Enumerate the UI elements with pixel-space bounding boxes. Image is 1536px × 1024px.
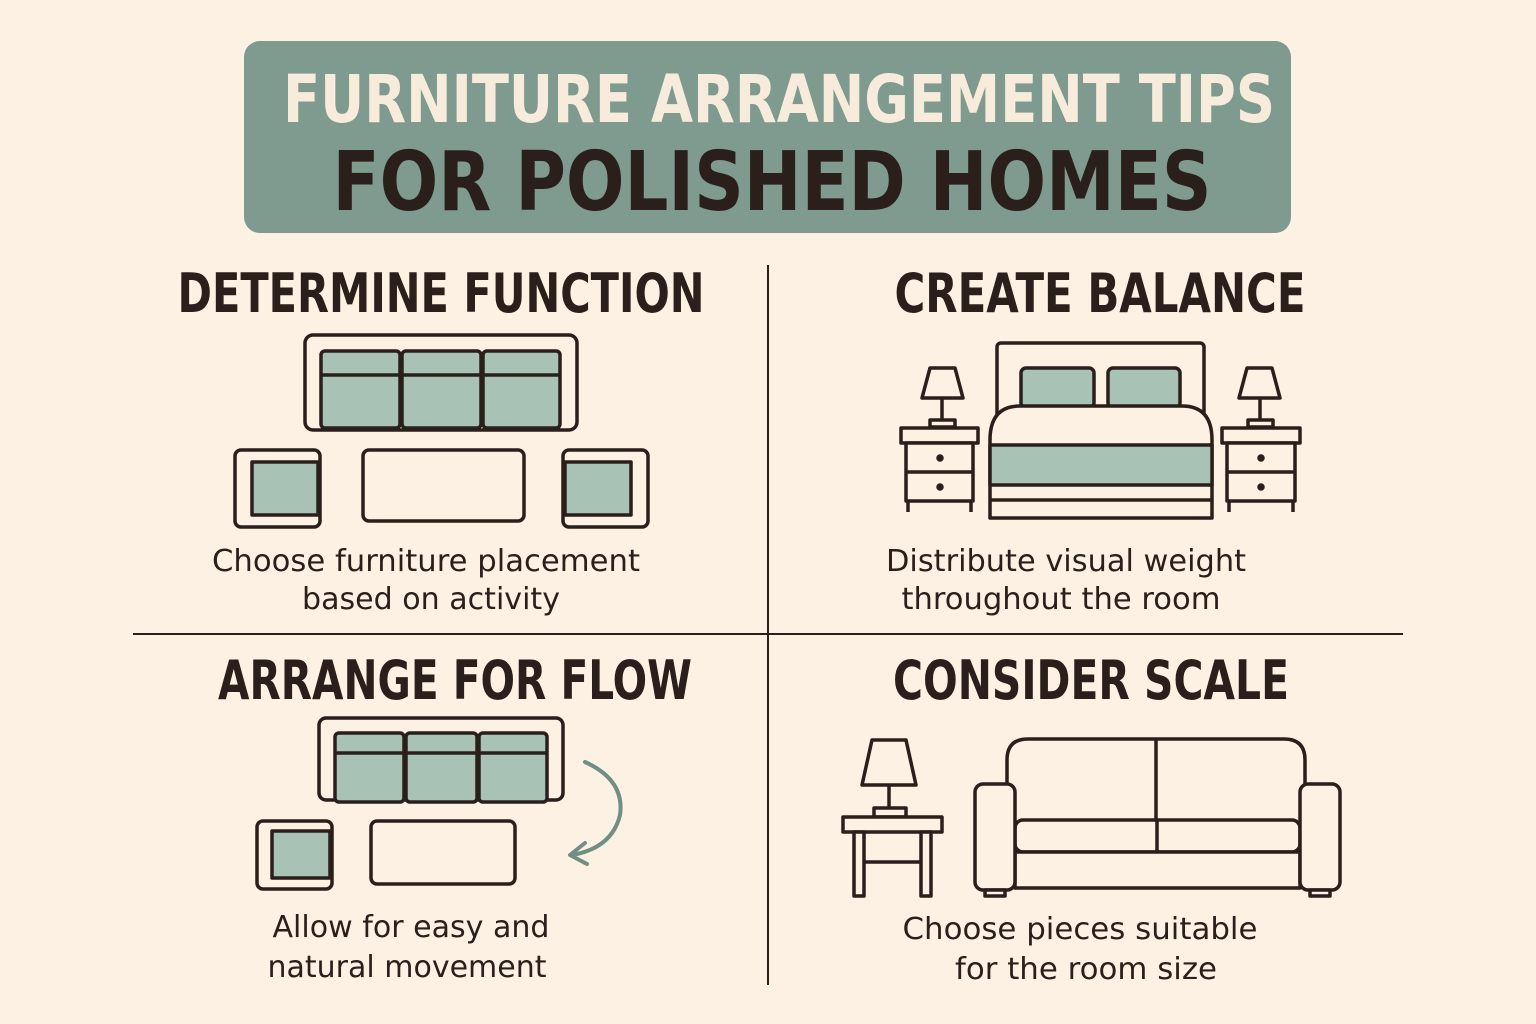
icon: lamp and side table	[843, 740, 942, 896]
text: flow description: Allow for easy and	[272, 910, 550, 945]
text: scale description: Choose pieces suitable	[902, 912, 1258, 947]
text: flow description: natural movement	[268, 950, 547, 985]
arrow: flow	[570, 762, 621, 864]
icon: bed	[990, 343, 1212, 518]
title banner: FOR POLISHED HOMES	[332, 135, 1212, 230]
icon: sofa	[319, 718, 563, 802]
text: balance description	[886, 544, 1246, 617]
text: function description: based on activity	[302, 582, 560, 617]
text: scale description	[902, 912, 1258, 987]
icon: coffee table	[363, 450, 524, 521]
heading: arrange for flow: ARRANGE FOR FLOW	[218, 649, 692, 712]
heading: determine function: DETERMINE FUNCTION	[178, 262, 704, 325]
panel: consider scale	[843, 649, 1340, 987]
icon: sofa	[305, 335, 577, 430]
panel: create balance	[886, 262, 1306, 617]
icon: large sofa	[975, 739, 1340, 896]
title banner: FURNITURE ARRANGEMENT TIPS	[283, 61, 1275, 138]
text: balance description: throughout the room	[902, 582, 1220, 617]
text: function description: Choose furniture placement	[212, 544, 640, 579]
icon: armchair right	[563, 450, 648, 527]
icon: armchair left	[235, 450, 320, 527]
text: scale description: for the room size	[955, 952, 1217, 987]
icon: armchair	[257, 821, 332, 889]
icon: left nightstand with lamp	[901, 368, 978, 512]
text: function description	[212, 544, 640, 617]
heading: create balance: CREATE BALANCE	[894, 262, 1306, 325]
icon: coffee table	[371, 821, 515, 884]
icon: right nightstand with lamp	[1222, 368, 1300, 512]
panel: arrange for flow	[218, 649, 692, 985]
text: balance description: Distribute visual weight	[886, 544, 1246, 579]
panel: determine function	[178, 262, 704, 617]
title banner	[244, 41, 1291, 233]
heading: consider scale: CONSIDER SCALE	[893, 649, 1289, 712]
text: flow description	[268, 910, 550, 985]
